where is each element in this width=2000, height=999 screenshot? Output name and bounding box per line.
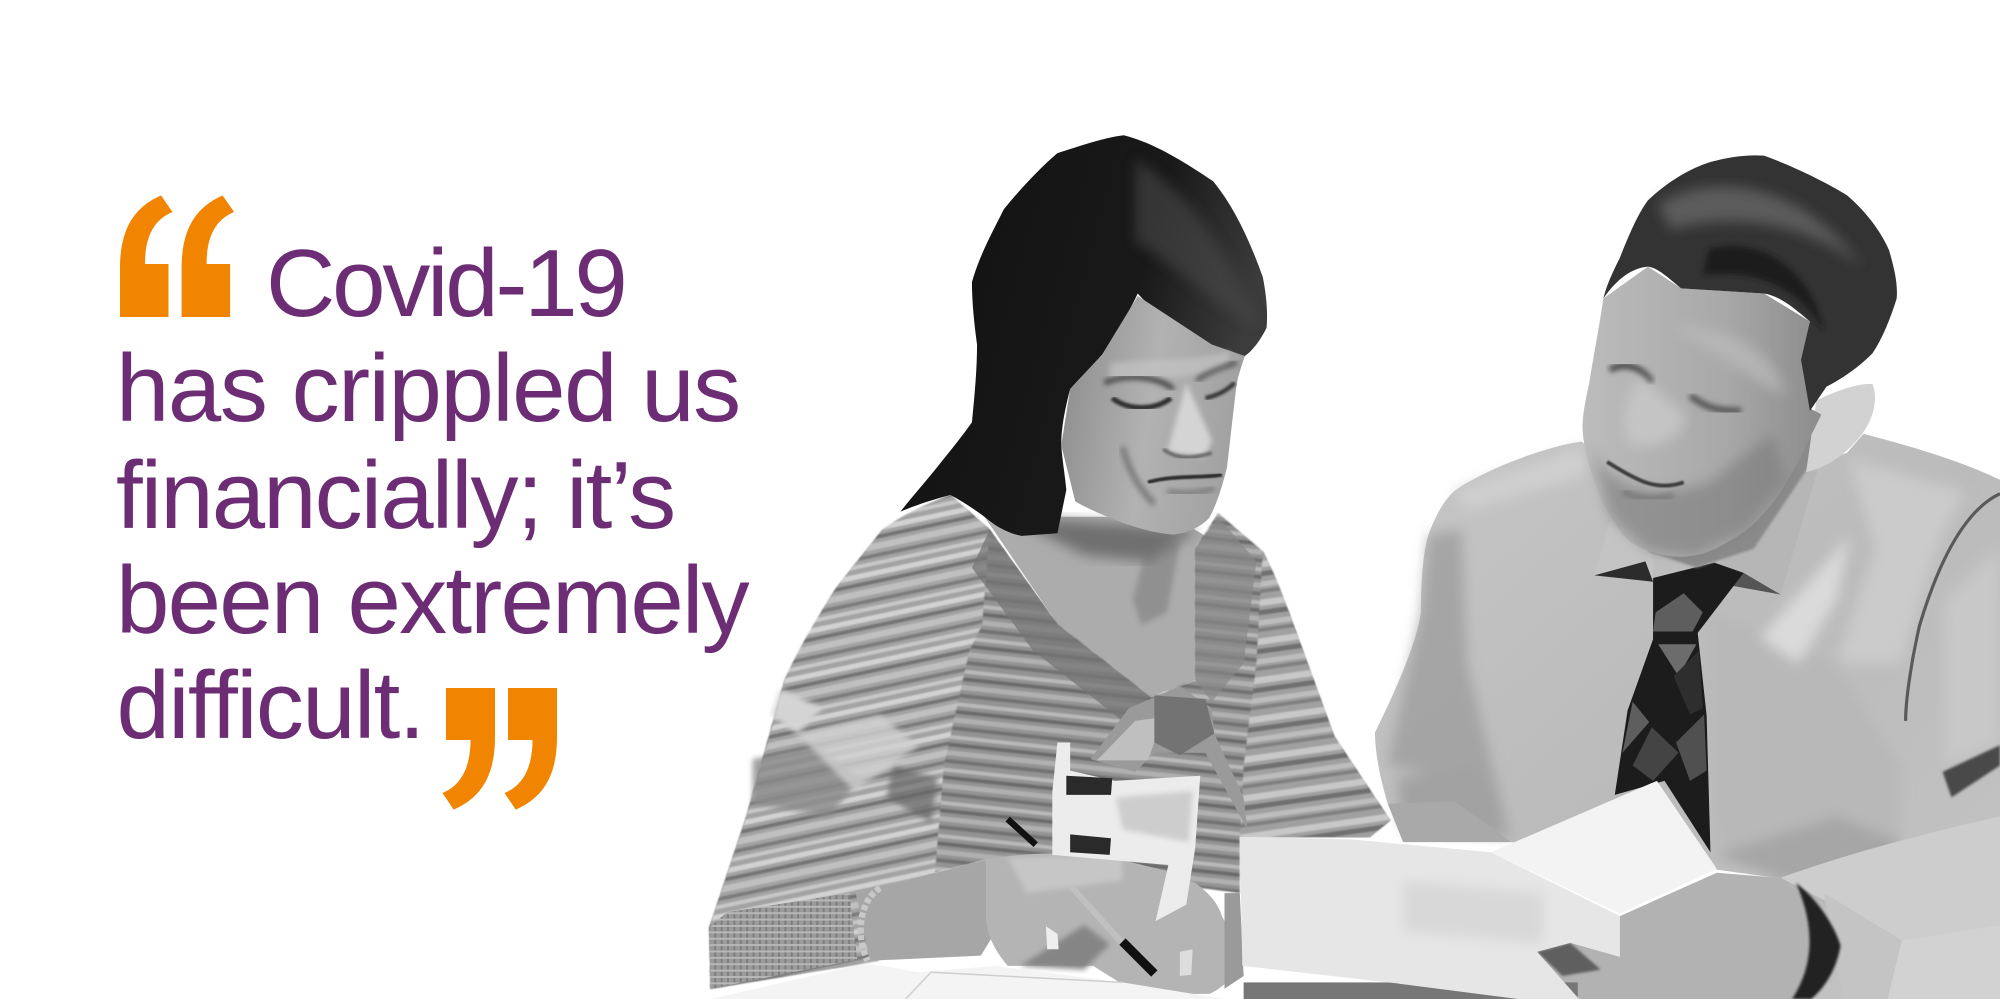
man sleeve fold [1943, 745, 2000, 797]
man hair [1603, 155, 1897, 411]
paperwork on table [710, 781, 1717, 999]
man stubble and features [1591, 325, 1786, 556]
man shirt [1375, 434, 2000, 999]
figure: man [1375, 155, 2000, 999]
woman wrist [1224, 893, 1244, 989]
man neck shadow [1648, 427, 1827, 568]
man thumb shadow [1537, 943, 1601, 976]
woman sweater body [709, 495, 1390, 989]
man sleeve seam [1906, 494, 2000, 721]
woman facial features [1105, 351, 1237, 504]
woman arm [856, 860, 995, 961]
woman hair highlights [1135, 159, 1256, 325]
man left collar [1594, 518, 1653, 582]
man right collar [1716, 440, 1827, 595]
receipt [1052, 743, 1200, 921]
woman neck and chest [976, 504, 1205, 697]
man hand [1537, 873, 1837, 999]
woman rings [1046, 926, 1059, 949]
man left hand [1388, 801, 1511, 842]
woman sleeve stripes [709, 495, 990, 989]
icon: opening quotation mark [120, 196, 234, 317]
woman neckline ribbing [972, 529, 1151, 721]
quote text: been extremely [116, 547, 748, 654]
woman bracelet [861, 888, 880, 961]
woman scarf knot [1091, 686, 1247, 829]
quote text: Covid-19 [266, 230, 625, 337]
white paper on table [710, 963, 1224, 999]
quote text: difficult. [116, 652, 424, 759]
woman sleeve diamond pattern [753, 689, 938, 823]
man ear [1806, 384, 1875, 472]
man shirt shading [1388, 447, 2000, 938]
man face [1583, 267, 1821, 557]
letter text shading [1403, 880, 1543, 944]
woman face [1061, 296, 1245, 535]
quote text [116, 230, 750, 759]
table edge [1244, 982, 1578, 999]
man cuff [1781, 817, 2000, 940]
man hand shadow [1792, 883, 1841, 999]
pen [1008, 819, 1154, 973]
quote text: financially; it’s [116, 442, 674, 549]
figure: woman [709, 135, 1390, 994]
woman hair [901, 135, 1267, 536]
icon: closing quotation mark [442, 688, 557, 810]
woman cuff [709, 893, 857, 989]
man tie [1615, 563, 1744, 852]
quote text: has crippled us [116, 335, 740, 442]
letter main sheet [1240, 837, 1620, 999]
woman hands [986, 853, 1245, 994]
letter flap [1491, 781, 1717, 914]
